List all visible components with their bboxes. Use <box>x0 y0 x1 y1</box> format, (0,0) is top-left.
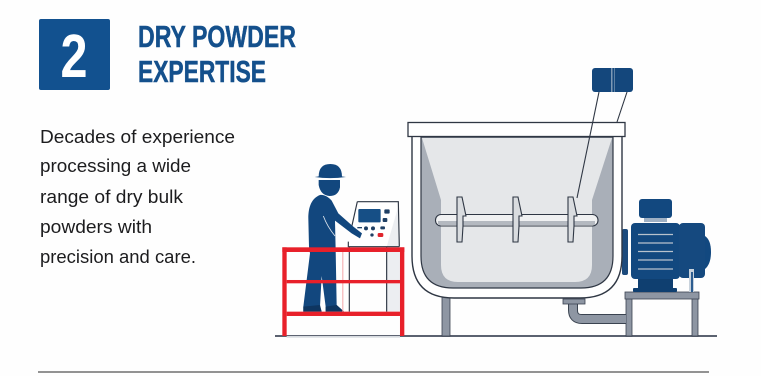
console screen <box>358 209 381 222</box>
tank rim <box>408 122 625 136</box>
bottom divider <box>38 371 709 373</box>
railing inner thin post <box>341 252 344 312</box>
motor cooling fins <box>638 234 673 269</box>
agitator shaft <box>436 214 598 226</box>
number badge: 2 <box>60 22 88 90</box>
interior light surface <box>422 138 612 282</box>
head <box>319 180 340 196</box>
mixer legs <box>442 297 450 336</box>
number badge <box>39 19 110 90</box>
motor <box>622 199 711 292</box>
console buttons <box>357 209 390 237</box>
title: EXPERTISE <box>138 54 266 89</box>
motor table <box>625 292 699 336</box>
description text <box>40 126 235 267</box>
tank shell <box>412 136 622 298</box>
worker <box>303 164 362 312</box>
mixer tank <box>408 68 633 298</box>
paddles <box>457 197 577 242</box>
feed chute <box>577 92 627 198</box>
tank interior <box>421 137 613 288</box>
ground line <box>275 335 717 337</box>
description text: Decades of experience <box>40 126 235 147</box>
feed hopper <box>592 68 633 92</box>
description text: range of dry bulk <box>40 186 184 207</box>
description text: processing a wide <box>40 155 191 176</box>
description text: precision and care. <box>40 246 196 267</box>
body <box>303 195 362 312</box>
title <box>138 19 296 89</box>
title: DRY POWDER <box>138 19 296 54</box>
control console <box>348 202 400 312</box>
safety railing <box>282 247 404 338</box>
drain pipe <box>563 299 626 319</box>
hard hat <box>319 164 342 177</box>
description text: powders with <box>40 216 152 237</box>
